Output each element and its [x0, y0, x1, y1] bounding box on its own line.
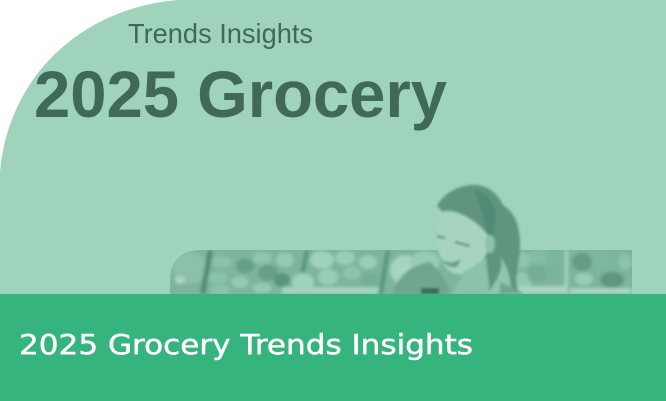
centre produce: [300, 250, 310, 274]
subtitle: Trends Insights: Trends Insights: [128, 18, 313, 49]
ear: [485, 235, 495, 253]
hair parting shadow: [474, 190, 496, 236]
neck: [452, 258, 490, 294]
footer banner: [0, 294, 666, 401]
ponytail highlight: [488, 256, 511, 294]
footer title: 2025 Grocery Trends Insights: [19, 328, 473, 361]
eyes and smile: [437, 236, 470, 246]
face: [436, 211, 489, 274]
panel: mint header background with curved corner: [0, 0, 666, 294]
hair and ponytail: [437, 185, 520, 294]
right produce: [518, 252, 530, 268]
left produce: [173, 252, 207, 284]
title: 2025 Grocery: 2025 Grocery: [34, 57, 447, 131]
photo: produce market shelves strip: [170, 250, 632, 295]
shirt dark detail: [421, 288, 439, 294]
photo: woman shopper: [393, 185, 525, 294]
shirt: [393, 262, 450, 294]
